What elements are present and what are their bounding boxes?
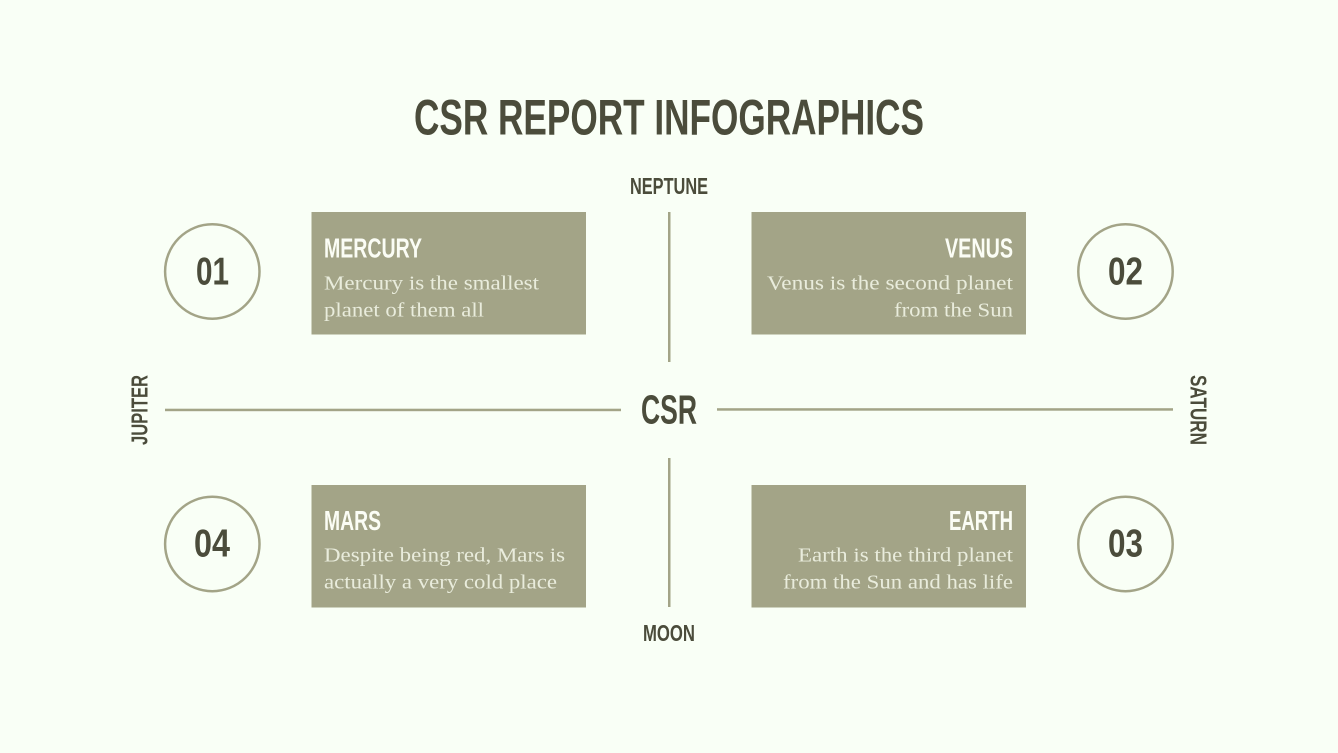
panel: Venus: Venus is the second planet	[767, 272, 1014, 294]
panel: Mars: MARS	[324, 505, 381, 536]
panel: Earth: EARTH	[949, 505, 1013, 536]
label: Saturn: SATURN	[1186, 375, 1212, 445]
panel: Earth	[752, 485, 1026, 608]
panel: Mercury	[312, 212, 586, 334]
panel: Earth: Earth is the third planet	[798, 544, 1013, 566]
number badge 02	[1078, 224, 1173, 319]
axis line: bottom	[668, 458, 670, 607]
number badge 01	[165, 224, 260, 319]
panel: Earth: from the Sun and has life	[783, 572, 1013, 594]
title: CSR REPORT INFOGRAPHICS	[414, 90, 924, 146]
number badge 04	[165, 497, 260, 591]
panel: Mars: actually a very cold place	[324, 572, 557, 594]
axis line: left	[165, 409, 621, 411]
label: Neptune: NEPTUNE	[630, 173, 708, 199]
panel: Venus: VENUS	[945, 232, 1013, 264]
number badge 03	[1078, 497, 1173, 591]
panel: Mars	[312, 485, 586, 608]
number badge 03: 03	[1108, 522, 1143, 566]
axis line: top	[668, 212, 670, 362]
panel: Mars: Despite being red, Mars is	[324, 544, 565, 566]
panel: Mercury: Mercury is the smallest	[324, 272, 539, 294]
panel: Venus	[752, 212, 1026, 334]
number badge 04: 04	[194, 522, 230, 566]
label: Jupiter: JUPITER	[126, 375, 152, 445]
panel: Venus: from the Sun	[894, 300, 1013, 322]
panel: Mercury: MERCURY	[324, 232, 422, 264]
panel: Mercury: planet of them all	[324, 300, 484, 322]
axis line: right	[717, 408, 1173, 411]
number badge 02: 02	[1108, 250, 1143, 294]
number badge 01: 01	[196, 250, 229, 294]
center label: CSR: CSR	[641, 386, 697, 432]
label: Moon: MOON	[643, 620, 695, 646]
